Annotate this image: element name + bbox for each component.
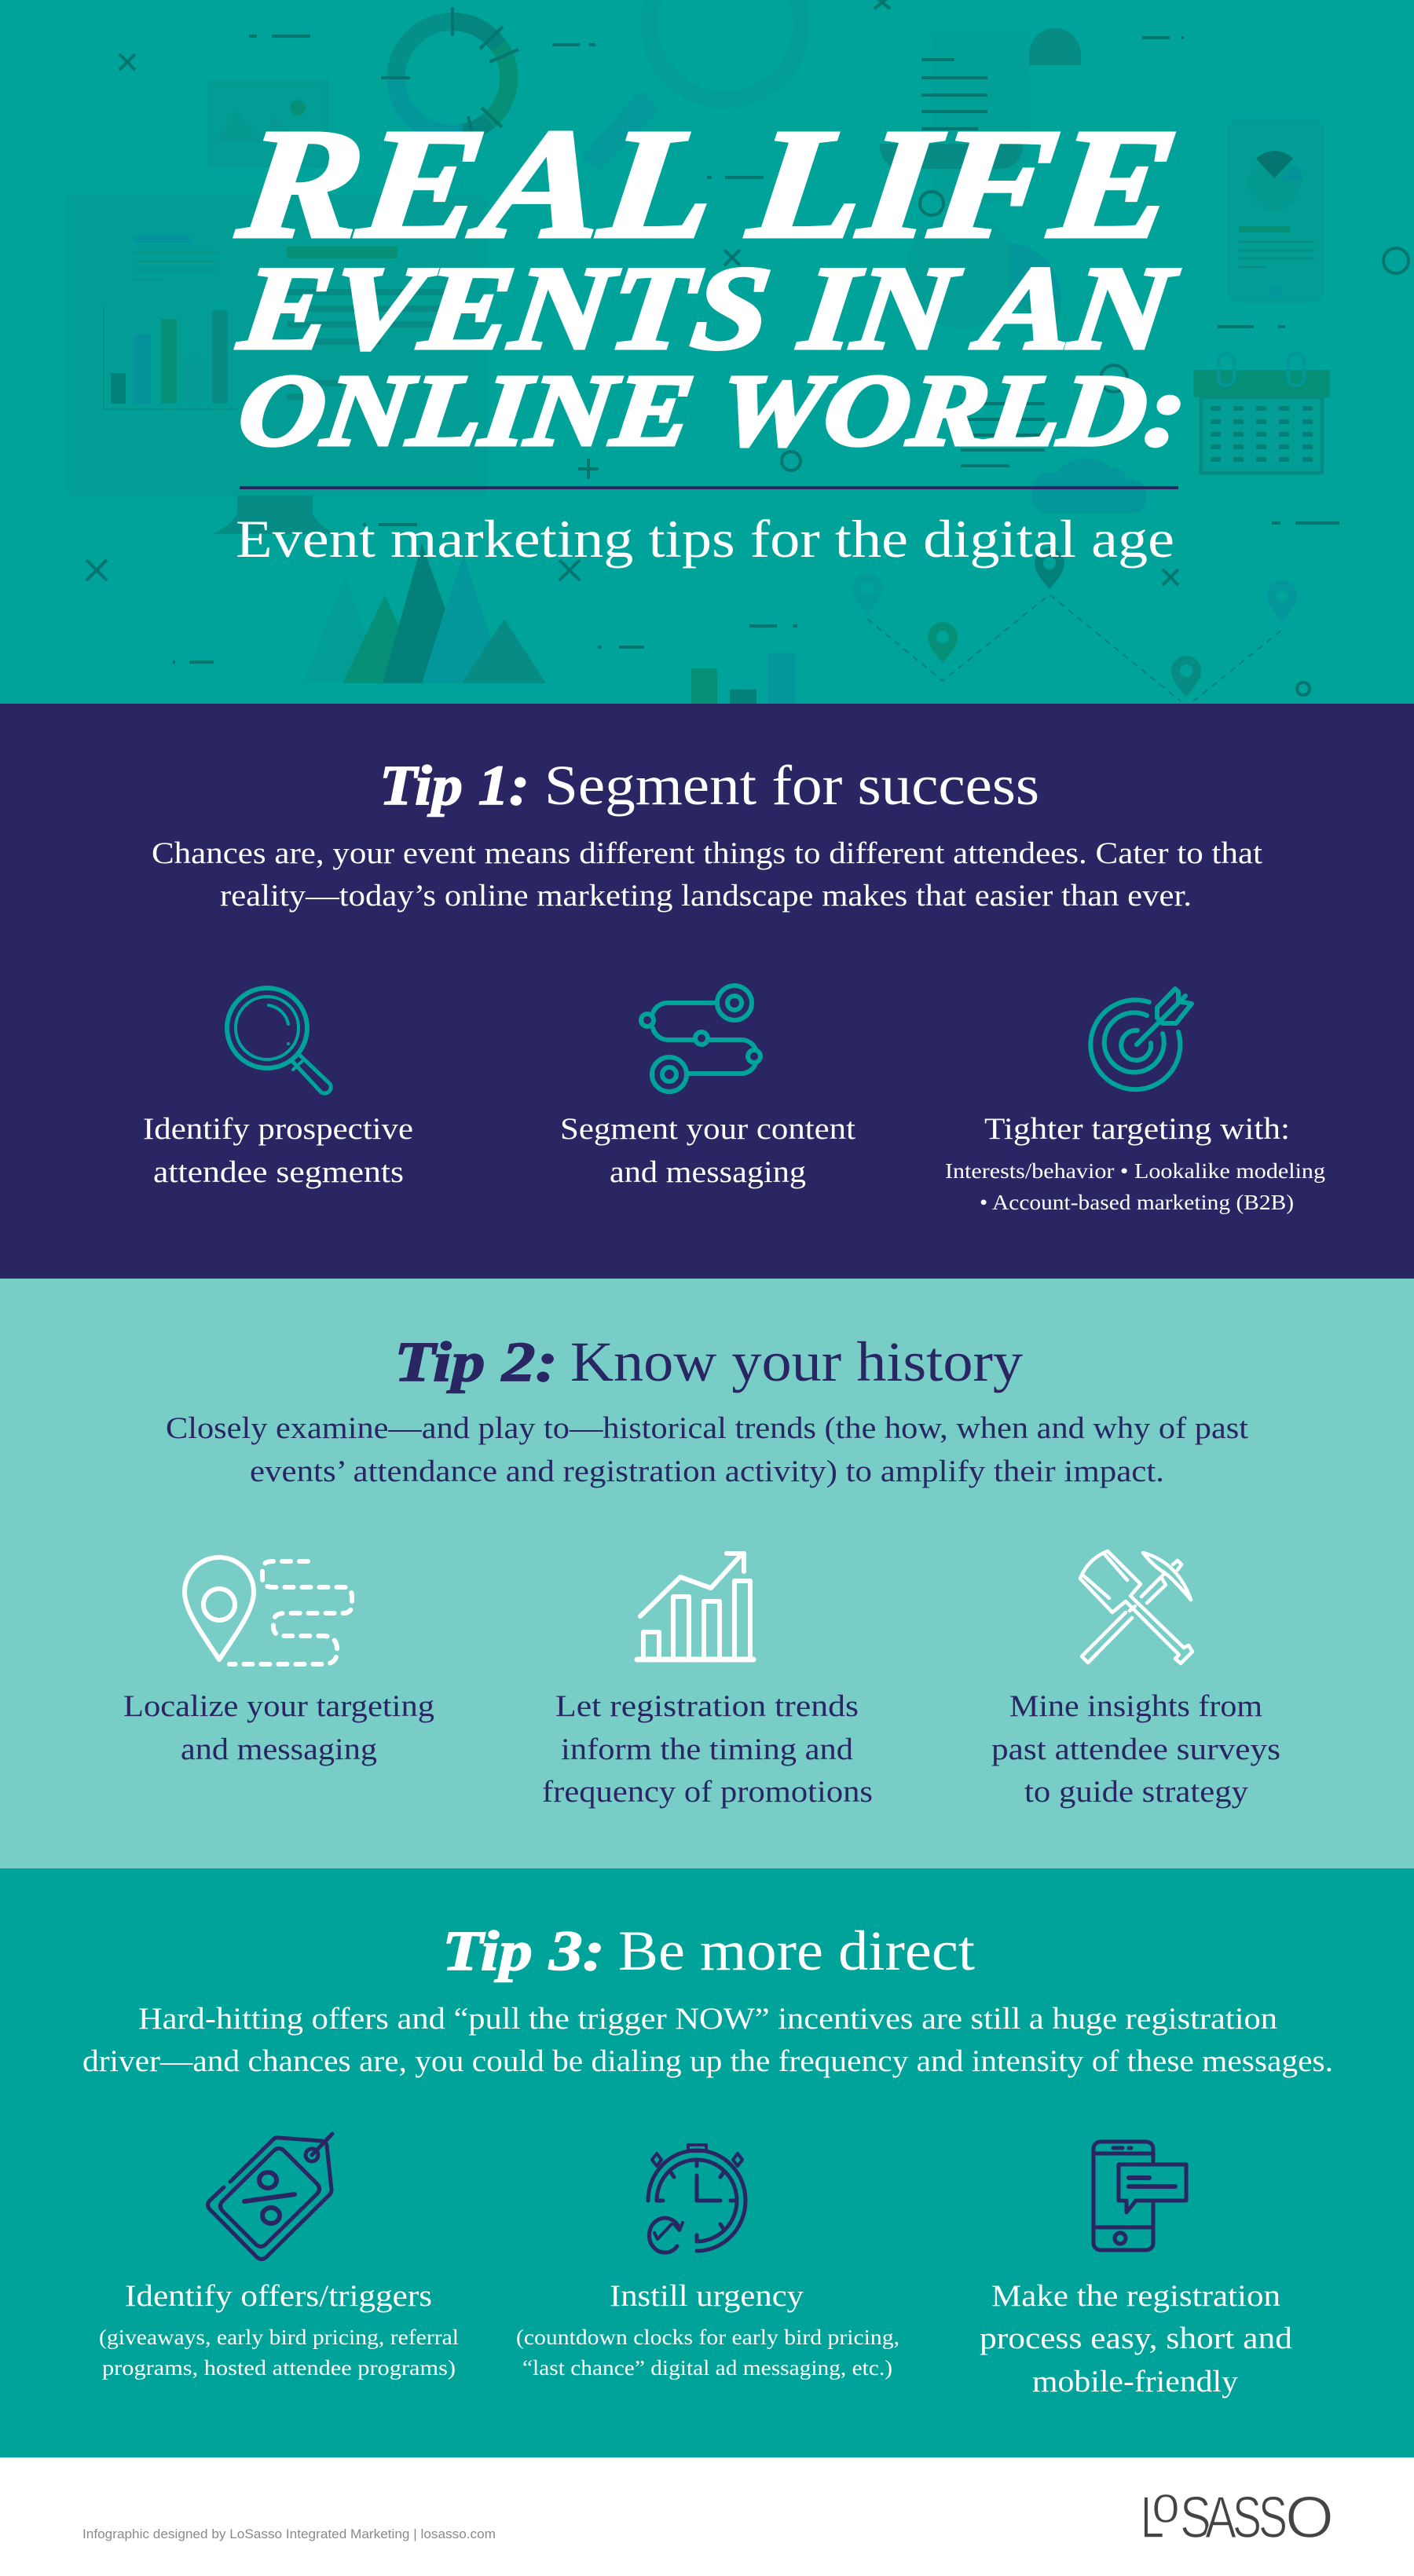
label: localize targeting: Localize your targeting [123, 1689, 434, 1723]
panel: footer [0, 2457, 1414, 2576]
label: identify segments: attendee segments [153, 1155, 404, 1189]
text: tip 2 intro: events’ attendance and registration activity) to amplify their impact. [250, 1454, 1164, 1488]
label: tighter targeting: • Account-based marketing (B2B) [980, 1191, 1294, 1214]
label: instill urgency: “last chance” digital ad messaging, etc.) [522, 2356, 892, 2380]
label: registration trends: frequency of promotions [542, 1775, 873, 1809]
heading: tip 1: Segment for success [544, 754, 1039, 817]
faded bars [691, 653, 795, 704]
label: registration process: process easy, short and [980, 2322, 1293, 2355]
title: EVENTS IN AN [233, 243, 1183, 375]
logo: LoSasso [1141, 2475, 1334, 2550]
title: ONLINE WORLD: [233, 354, 1192, 467]
label: registration process: Make the registration [991, 2279, 1280, 2313]
icon: map pin with dashed route [185, 1557, 352, 1664]
faded map pins and dashed route [852, 548, 1297, 701]
text: tip 2 intro [166, 1411, 1248, 1488]
label: segment content: and messaging [610, 1155, 806, 1189]
label: registration trends: inform the timing and [561, 1733, 854, 1766]
label: segment content [560, 1112, 855, 1189]
logo: LoSasso: S [1180, 2484, 1211, 2550]
icon: crossed shovel and pickaxe [1080, 1551, 1192, 1663]
panel: hero [0, 0, 1414, 704]
faded cloud and pie [905, 215, 1147, 514]
heading: tip 3: Be more direct [618, 1919, 975, 1982]
faded calendar [1193, 353, 1330, 473]
label: identify offers: (giveaways, early bird pricing, referral [99, 2325, 459, 2349]
label: registration trends [542, 1689, 873, 1809]
text: tip 3 intro: driver—and chances are, you could be dialing up the frequency and intensity of these messages. [82, 2044, 1333, 2078]
label: mine insights [991, 1689, 1280, 1809]
text: tip 1 intro [152, 836, 1262, 913]
logo: LoSasso: o [1152, 2475, 1180, 2534]
title [230, 97, 1192, 467]
text: tip 3 intro [82, 2002, 1333, 2078]
faded monitor [64, 194, 487, 534]
text: tip 3 intro: Hard-hitting offers and “pull the trigger NOW” incentives are still a huge registration [138, 2002, 1277, 2036]
heading: tip 3: Tip 3: [442, 1919, 605, 1982]
label: registration trends: Let registration trends [555, 1689, 859, 1723]
panel: tip 1 [0, 704, 1414, 1279]
text: credit: Infographic designed by LoSasso Integrated Marketing | losasso.com [82, 2527, 496, 2541]
label: tighter targeting: Tighter targeting with: [984, 1112, 1290, 1146]
label: identify offers: programs, hosted attendee programs) [102, 2356, 456, 2380]
title divider [240, 486, 1178, 489]
label: registration process: mobile-friendly [1032, 2365, 1239, 2399]
label: mine insights: past attendee surveys [991, 1733, 1280, 1766]
label: identify offers: Identify offers/triggers [125, 2279, 432, 2313]
text: tip 1 intro: Chances are, your event means different things to different attendees. Cater to that [152, 836, 1262, 870]
heading: tip 2: Tip 2: [394, 1330, 558, 1393]
icon: magnifying glass [227, 988, 331, 1093]
faded mountains [302, 543, 546, 683]
label: tighter targeting [945, 1112, 1325, 1214]
icon: rising bar chart [637, 1553, 753, 1659]
panel: tip 2 [0, 1279, 1414, 1868]
label: mine insights: to guide strategy [1024, 1775, 1249, 1809]
icon: stopwatch with check [648, 2145, 745, 2252]
label: instill urgency [516, 2279, 899, 2380]
small crosses, dashes and rings [86, 0, 1409, 695]
logo: LoSasso: S [1233, 2484, 1262, 2550]
label: tighter targeting: Interests/behavior • Lookalike modeling [945, 1159, 1325, 1183]
heading: tip 1: Tip 1: [379, 754, 529, 817]
label: identify offers [99, 2279, 459, 2380]
icon: target with arrow [1090, 989, 1192, 1089]
logo: LoSasso: O [1285, 2484, 1334, 2550]
text: tip 1 intro: reality—today’s online marketing landscape makes that easier than ever. [220, 879, 1192, 913]
subtitle: Event marketing tips for the digital age [236, 509, 1174, 569]
label: segment content: Segment your content [560, 1112, 855, 1146]
label: instill urgency: (countdown clocks for early bird pricing, [516, 2325, 899, 2349]
label: localize targeting [123, 1689, 434, 1766]
logo: LoSasso: A [1205, 2484, 1236, 2550]
faded document [880, 28, 1081, 202]
icon: phone with message bubble [1093, 2142, 1186, 2250]
logo: LoSasso: L [1141, 2484, 1164, 2550]
icon: percent price tag [207, 2134, 332, 2259]
faded donut chart [381, 7, 518, 134]
text: tip 2 intro: Closely examine—and play to—historical trends (the how, when and why of past [166, 1411, 1248, 1445]
label: identify segments [143, 1112, 413, 1189]
heading: tip 1 [379, 754, 1039, 817]
heading: tip 3 [442, 1919, 975, 1982]
label: registration process [980, 2279, 1293, 2399]
faded image frame [210, 82, 327, 165]
heading: tip 2 [394, 1330, 1023, 1393]
panel: tip 3 [0, 1868, 1414, 2457]
label: localize targeting: and messaging [181, 1733, 377, 1766]
heading: tip 2: Know your history [570, 1330, 1023, 1393]
label: instill urgency: Instill urgency [610, 2279, 804, 2313]
background pattern of faded marketing icons [64, 0, 1409, 704]
logo: LoSasso: S [1258, 2484, 1288, 2550]
title: REAL LIFE [230, 97, 1186, 271]
icon: segmented path [641, 986, 760, 1092]
faded magnifier [581, 0, 801, 171]
label: identify segments: Identify prospective [143, 1112, 413, 1146]
label: mine insights: Mine insights from [1009, 1689, 1262, 1723]
faded phone [1229, 121, 1323, 301]
